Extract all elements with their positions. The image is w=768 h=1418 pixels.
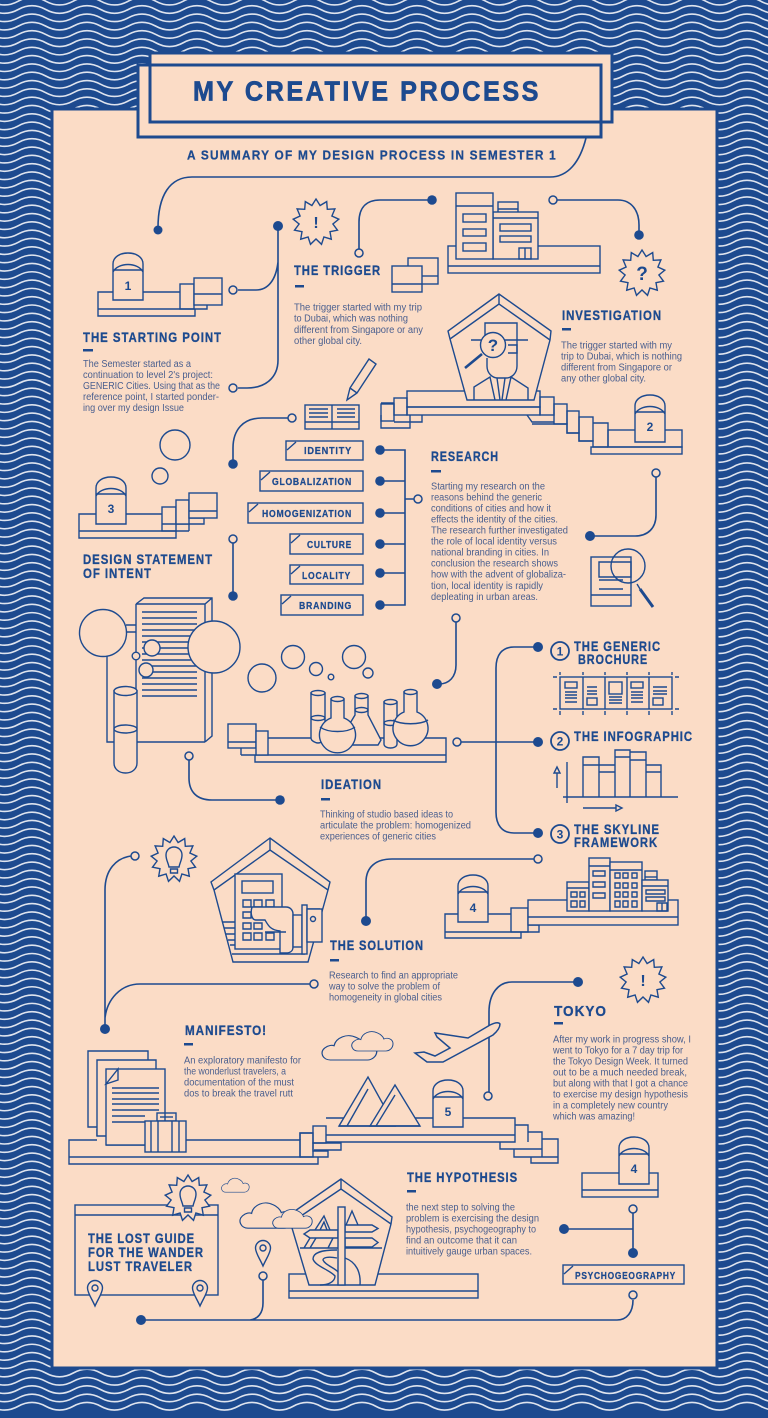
icon: brochure layout	[553, 672, 679, 715]
panel: peach sheet	[52, 109, 717, 1368]
heading: 2 the infographic: THE INFOGRAPHIC	[574, 729, 693, 744]
text: the hypothesis: the next step to solving the	[406, 1202, 515, 1214]
icon: detective house on stepped platform: 2	[647, 420, 654, 434]
icon: burst light bulb (guide)	[165, 1175, 211, 1220]
text: design statement of intent: OF INTENT	[83, 566, 152, 581]
connector: tag bus to research text	[375, 445, 422, 610]
connector: solution to skyline	[361, 855, 542, 926]
icon: map pin center	[256, 1240, 270, 1266]
icon: map pin right	[192, 1280, 208, 1306]
text: tokyo: TOKYO	[554, 1003, 607, 1020]
connector: investigation to research	[585, 469, 660, 541]
icon: map pin left	[88, 1280, 102, 1306]
icon: lock 3 and steps: 3	[108, 502, 115, 516]
text: the hypothesis: THE HYPOTHESIS	[407, 1170, 518, 1185]
tag: globalization: GLOBALIZATION	[272, 476, 352, 488]
connector: hypothesis to psychogeography	[136, 1272, 637, 1325]
text: investigation: trip to Dubai, which is nothing	[561, 352, 682, 362]
text: the trigger: other global city.	[294, 336, 362, 347]
text: tokyo: the Tokyo Design Week. It turned	[553, 1056, 688, 1068]
icon: clouds above mountains	[322, 1032, 393, 1060]
icon: bubbles above flasks	[248, 646, 373, 692]
panel: lost guide	[75, 1175, 218, 1306]
icon: burst question	[619, 250, 665, 295]
text: ideation: articulate the problem: homogenized	[320, 820, 471, 832]
text: the starting point: ing over my design Issue	[83, 403, 184, 414]
text: research: Starting my research on the	[431, 482, 545, 492]
heading: 3 the skyline framework: FRAMEWORK	[574, 835, 658, 850]
icon: detective house on stepped platform	[381, 294, 682, 454]
title banner	[137, 53, 612, 137]
text: ideation: IDEATION	[321, 777, 382, 792]
tag: globalization	[260, 471, 363, 491]
icon: burst exclamation (tokyo): !	[640, 973, 646, 990]
icon: airplane	[415, 977, 583, 1100]
text: manifesto: dos to break the travel rutt	[184, 1088, 293, 1100]
text: the solution	[328, 938, 458, 1004]
text: investigation: INVESTIGATION	[562, 308, 662, 323]
text: the solution: Research to find an appropriate	[329, 970, 458, 982]
text: manifesto	[184, 1023, 302, 1100]
text: tokyo: in a completely new country	[553, 1100, 668, 1112]
tag: branding	[281, 595, 363, 615]
text: investigation: any other global city.	[561, 374, 646, 384]
text: manifesto: MANIFESTO!	[185, 1023, 267, 1038]
text: the starting point: THE STARTING POINT	[83, 330, 222, 345]
text: the starting point	[83, 330, 222, 414]
icon: lock 4 on block	[582, 1137, 658, 1197]
icon: calculator house	[211, 838, 330, 962]
tag: culture: CULTURE	[307, 539, 352, 551]
text: tokyo: to exercise my design hypothesis	[553, 1090, 688, 1100]
heading: 3 the skyline framework: THE SKYLINE	[574, 822, 660, 837]
text: tokyo: which was amazing!	[552, 1112, 635, 1122]
heading: 1 the generic brochure: 1	[557, 644, 564, 658]
icon: small cloud	[222, 1178, 249, 1192]
text: the solution: way to solve the problem of	[328, 982, 440, 992]
text: research: The research further investigated	[431, 526, 568, 536]
text: research	[431, 449, 568, 603]
connector: starting point to trigger	[229, 221, 283, 392]
text: ideation	[320, 777, 471, 842]
icon: two documents	[392, 258, 438, 292]
subtitle: A SUMMARY OF MY DESIGN PROCESS IN SEMESTER 1	[187, 148, 557, 162]
text: tokyo: After my work in progress show, I	[553, 1034, 691, 1046]
text: the trigger: different from Singapore or any	[294, 325, 423, 336]
connector: building to investigation	[549, 196, 644, 240]
text: the solution: THE SOLUTION	[330, 938, 424, 953]
text: design statement of intent	[83, 552, 213, 581]
text: investigation: The trigger started with my	[561, 340, 672, 352]
text: manifesto: documentation of the must	[184, 1078, 294, 1088]
text: the starting point: The Semester started as a	[83, 359, 192, 370]
text: research: national branding in cities. In	[431, 548, 549, 558]
text: the starting point: continuation to level 2's project:	[83, 370, 213, 381]
panel: lost guide: FOR THE WANDER	[88, 1245, 204, 1260]
icon: laboratory flasks on shelf	[228, 690, 446, 762]
text: the starting point: GENERIC Cities. Using that as the	[83, 381, 220, 392]
icon: burst exclamation (trigger)	[293, 199, 339, 244]
text: tokyo	[552, 1003, 691, 1122]
text: research: the role of local identity versus	[431, 536, 557, 548]
connector: research to design statement	[228, 535, 238, 601]
text: manifesto: An exploratory manifesto for	[184, 1056, 302, 1066]
tag: culture	[290, 534, 363, 554]
text: research: RESEARCH	[431, 449, 499, 464]
text: design statement of intent: DESIGN STATEMENT	[83, 552, 213, 567]
icon: statement document with bubbles and test tube	[80, 598, 240, 773]
text: research: depleating in urban areas.	[431, 592, 538, 603]
connector: book to research tags	[228, 414, 296, 469]
text: research: reasons behind the generic	[431, 492, 542, 504]
text: the hypothesis: intuitively gauge urban spaces.	[406, 1246, 532, 1258]
icon: starting point lock and steps	[98, 253, 222, 316]
text: manifesto: the wonderlust travelers, a	[184, 1066, 287, 1078]
title banner: MY CREATIVE PROCESS	[193, 76, 541, 106]
connector: ideation to three outcomes	[453, 642, 543, 838]
icon: manifesto shelf with documents and briefcase	[69, 1051, 318, 1164]
panel: lost guide: LUST TRAVELER	[88, 1259, 193, 1274]
text: the trigger: The trigger started with my trip	[294, 302, 422, 314]
heading: 1 the generic brochure	[551, 639, 661, 667]
heading: 2 the infographic: 2	[557, 734, 564, 748]
connector: research to ideation	[432, 614, 460, 689]
text: the trigger: THE TRIGGER	[294, 263, 381, 278]
icon: burst exclamation (trigger): !	[313, 215, 319, 232]
connector: lock 4 to psychogeography	[559, 1205, 638, 1258]
tag: locality: LOCALITY	[302, 570, 351, 582]
heading: 1 the generic brochure: BROCHURE	[578, 652, 648, 667]
text: the hypothesis	[406, 1170, 539, 1258]
tags: research keywords	[248, 441, 363, 615]
heading: 1 the generic brochure: THE GENERIC	[574, 639, 661, 654]
icon: central stepped platform with mountains and lock 5	[300, 1077, 558, 1163]
icon: burst exclamation (tokyo)	[620, 957, 666, 1002]
icon: lock 4 on block: 4	[631, 1162, 638, 1176]
text: investigation	[561, 308, 682, 384]
text: the trigger	[294, 263, 423, 347]
tag: identity: IDENTITY	[304, 445, 352, 457]
icon: skyline lock and platform: 4	[470, 901, 477, 915]
icon: open book	[305, 405, 359, 429]
text: the solution: homogeneity in global cities	[329, 992, 442, 1004]
tag: locality	[290, 565, 363, 584]
tag: psychogeography	[563, 1265, 684, 1284]
tag: identity	[286, 441, 363, 460]
heading: 3 the skyline framework	[551, 822, 660, 850]
text: the hypothesis: hypothesis, psychogeography to	[406, 1224, 536, 1236]
text: tokyo: but along with that I got a chance	[553, 1078, 688, 1090]
icon: clouds beside house	[240, 1203, 312, 1228]
icon: central stepped platform with mountains and lock 5: 5	[445, 1105, 452, 1119]
icon: bubbles above lock 3	[152, 430, 190, 484]
text: research: tion, local identity is rapidly	[431, 581, 543, 592]
icon: magnified document	[591, 549, 653, 607]
icon: building on platform	[448, 193, 600, 273]
tag: homogenization	[248, 503, 363, 523]
text: the trigger: to Dubai, which was nothing	[294, 314, 408, 324]
connector: title to starting point	[154, 138, 586, 234]
icon: hypothesis house on platform	[289, 1179, 478, 1298]
text: the hypothesis: find an outcome that it can	[406, 1236, 517, 1246]
text: the starting point: reference point, I started ponder-	[83, 392, 219, 403]
tag: branding: BRANDING	[299, 600, 352, 612]
icon: starting point lock and steps: 1	[125, 279, 132, 293]
text: ideation: experiences of generic cities	[320, 832, 436, 842]
icon: lock 3 and steps	[79, 477, 217, 538]
tag: psychogeography: PSYCHOGEOGRAPHY	[575, 1270, 676, 1282]
text: tokyo: went to Tokyo for a 7 day trip for	[552, 1046, 684, 1056]
connector: solution to manifesto	[100, 852, 318, 1034]
heading: 3 the skyline framework: 3	[557, 828, 564, 842]
text: tokyo: out to be a much needed break,	[553, 1068, 687, 1078]
icon: pencil	[347, 359, 376, 400]
chart: bar chart icon	[554, 750, 678, 811]
text: research: effects the identity of the cities.	[431, 514, 558, 526]
connector: statement to ideation	[185, 752, 285, 805]
icon: skyline lock and platform	[445, 858, 678, 938]
panel: lost guide: THE LOST GUIDE	[88, 1231, 195, 1246]
connector: trigger to building	[355, 195, 437, 257]
text: research: conditions of cities and how it	[431, 504, 551, 514]
text: investigation: different from Singapore or	[561, 362, 673, 374]
text: ideation: Thinking of studio based ideas to	[320, 810, 453, 820]
text: the hypothesis: problem is exercising the design	[406, 1214, 539, 1224]
heading: 2 the infographic	[551, 729, 693, 750]
icon: detective house on stepped platform: ?	[488, 336, 498, 355]
text: research: how with the advent of globaliza-	[431, 570, 566, 580]
tag: homogenization: HOMOGENIZATION	[262, 508, 352, 520]
icon: burst light bulb	[151, 836, 197, 881]
text: research: conclusion the research shows	[431, 558, 558, 570]
icon: burst question: ?	[636, 264, 648, 285]
